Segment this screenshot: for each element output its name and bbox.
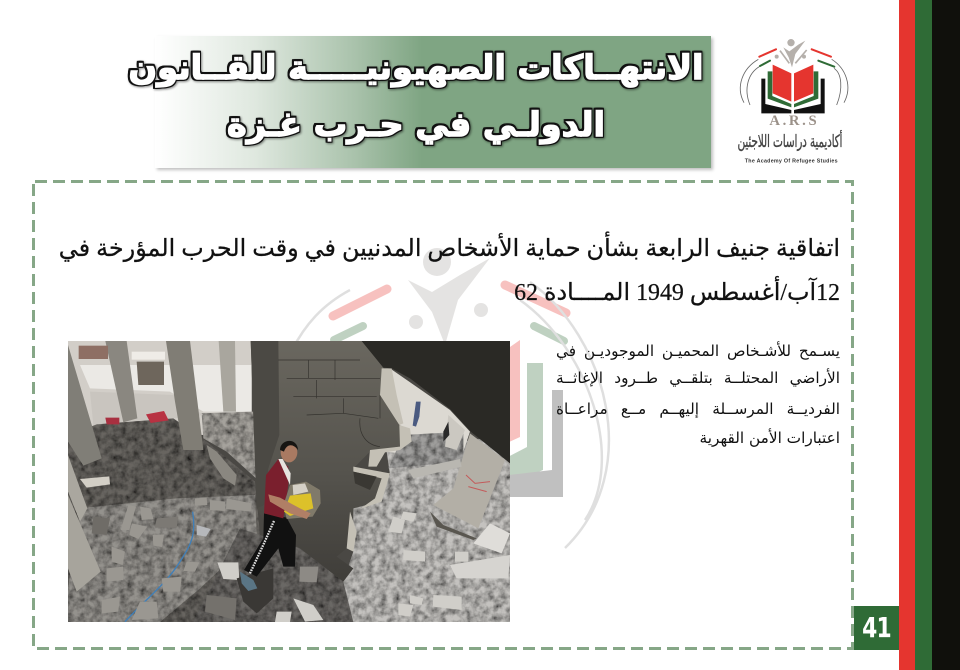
paragraph line 3: الفرديــة المرســلة إليهــم مــع مراعــاة <box>556 400 840 418</box>
page number <box>854 606 899 650</box>
head <box>281 442 297 462</box>
logo english name: The Academy Of Refugee Studies <box>745 158 838 164</box>
heading line 1: اتفاقية جنيف الرابعة بشأن حماية الأشخاص المدنيين في وقت الحرب المؤرخة في <box>59 236 840 262</box>
title line 2: الدولـي في حـرب غـزة <box>227 105 605 144</box>
logo figure <box>775 39 807 67</box>
red debris <box>146 411 169 423</box>
bright background <box>68 341 510 622</box>
arm <box>268 494 311 519</box>
fallen slab <box>207 445 237 486</box>
balcony and window <box>79 346 108 359</box>
brick joints <box>278 360 380 447</box>
broken wall edge <box>347 368 412 552</box>
title line 1: الانتهــاكات الصهيونيـــــة للقــانون <box>128 48 704 87</box>
right rubble <box>343 435 510 622</box>
pale stones <box>217 512 510 622</box>
dark ceiling <box>362 341 510 463</box>
rubble floor <box>68 418 260 622</box>
dark ground by boy <box>237 568 273 613</box>
distant people <box>413 402 421 427</box>
paragraph line 2: الأراضي المحتلــة بتلقــي طــرود الإغاثــة <box>556 369 840 387</box>
bowl <box>283 482 321 519</box>
paragraph text <box>556 341 840 447</box>
shirt <box>264 459 288 518</box>
logo initials: A.R.S <box>769 113 819 129</box>
logo book <box>761 65 825 113</box>
hole in wall <box>353 472 377 490</box>
heading line 2: 12آب/أغسطس 1949 المــــادة 62 <box>514 280 840 306</box>
foot <box>240 572 257 591</box>
brick wall <box>251 341 410 582</box>
stones <box>92 498 252 620</box>
trousers <box>244 513 296 577</box>
concrete column right <box>433 433 505 528</box>
page number digits: 41 <box>862 611 891 644</box>
yellow bag <box>284 493 313 516</box>
red graffiti <box>466 475 490 492</box>
paragraph line 1: يسـمح للأشـخاص المحميـن الموجوديـن في <box>556 342 840 360</box>
logo arabic name: أكاديمية دراسات اللاجئين <box>738 130 843 152</box>
logo <box>738 39 848 164</box>
boy <box>240 441 321 591</box>
title banner <box>127 36 714 172</box>
upper left pillars <box>68 345 102 466</box>
side stripes <box>899 0 960 670</box>
photo: boy in destroyed building <box>68 341 510 622</box>
heading text <box>59 231 840 306</box>
blue hose <box>125 512 194 622</box>
paragraph line 4: اعتبارات الأمن القهرية <box>700 429 840 447</box>
banner gradient <box>155 36 711 168</box>
lower centre floor <box>193 528 367 622</box>
logo arcs <box>740 49 848 105</box>
